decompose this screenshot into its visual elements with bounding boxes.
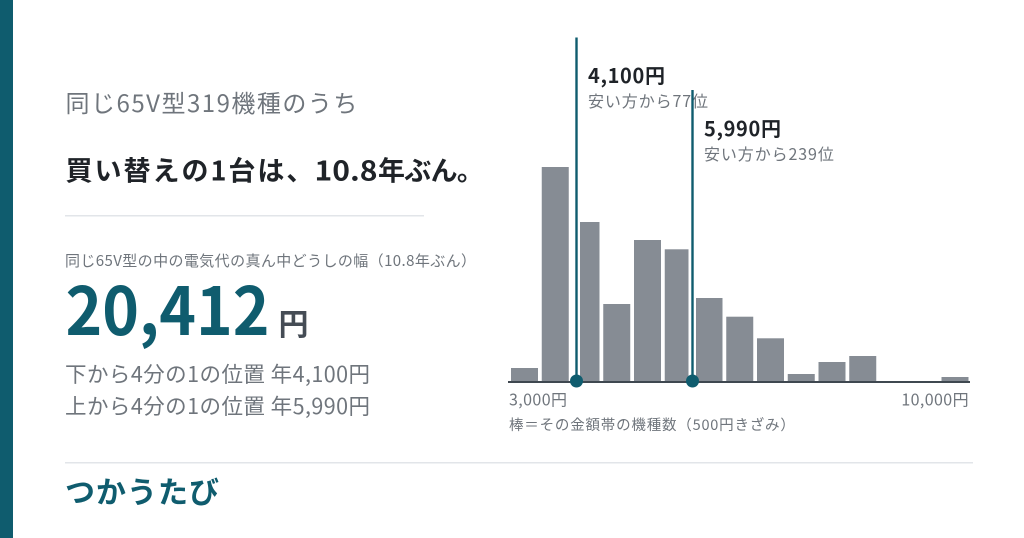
metric caption: 同じ65V型の中の電気代の真ん中どうしの幅（10.8年ぶん） (65, 250, 476, 271)
axis baseline (508, 381, 970, 383)
quartile details: 上から4分の1の位置 年5,990円 (65, 390, 370, 421)
axis labels (509, 386, 969, 410)
quartile details (65, 358, 370, 421)
headline: 10.8 (314, 150, 378, 188)
marker: lower quartile: 4,100円 (588, 60, 666, 89)
footer heading: つかうたび (65, 468, 220, 512)
headline: 買い替えの1台は、 (66, 150, 315, 188)
metric value: 円 (278, 300, 308, 344)
axis labels: 3,000円 (509, 386, 567, 410)
metric value: 20,412 (66, 259, 270, 355)
intro text: 同じ65V型319機種のうち (66, 84, 359, 119)
marker: upper quartile (686, 90, 835, 388)
axis labels: 10,000円 (901, 386, 969, 410)
headline (66, 150, 483, 188)
accent side bar (0, 0, 13, 538)
quartile details: 下から4分の1の位置 年4,100円 (65, 358, 370, 389)
marker: upper quartile: 安い方から239位 (704, 141, 835, 165)
marker: lower quartile (570, 38, 709, 388)
marker: upper quartile: 5,990円 (704, 113, 782, 142)
histogram bars (511, 167, 968, 382)
histogram (508, 167, 970, 435)
headline: 年ぶん。 (378, 150, 483, 188)
chart note: 棒＝その金額帯の機種数（500円きざみ） (509, 414, 796, 435)
marker: lower quartile: 安い方から77位 (588, 88, 709, 112)
